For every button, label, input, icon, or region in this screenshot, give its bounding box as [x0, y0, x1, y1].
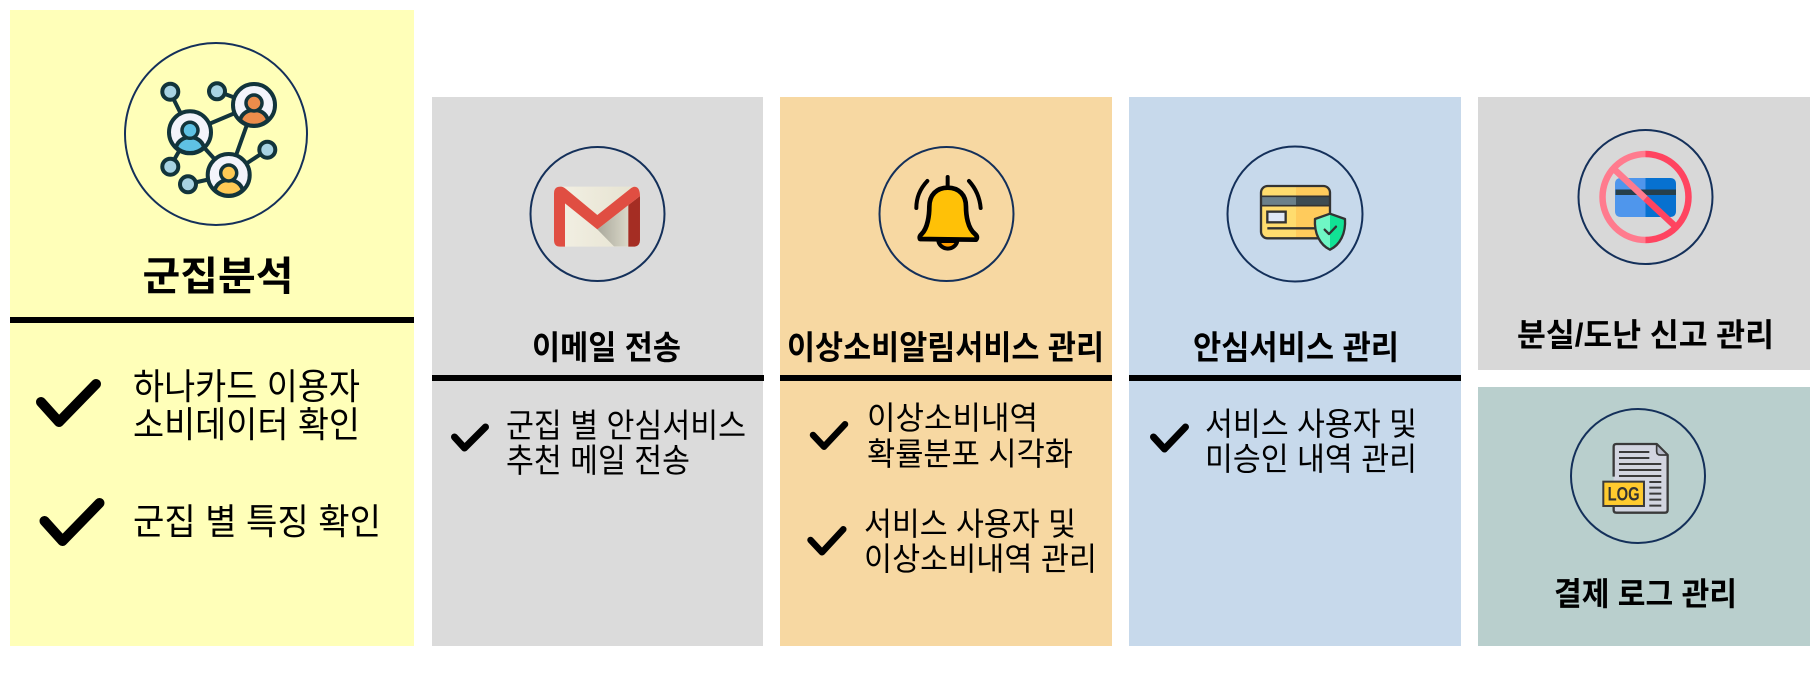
text: 안심서비스 추천 메일 전송: [506, 407, 746, 479]
panel: 안심서비스 관리: [1129, 97, 1461, 646]
icon: mail: [530, 147, 664, 281]
icon: secure card: [1228, 146, 1362, 282]
heading: 이상소비알림서비스 관리: [787, 329, 1104, 366]
icon: bell: [880, 147, 1014, 281]
text: 이용자 소비데이터 확인: 소비데이터 확인: [133, 404, 360, 445]
check mark: [810, 529, 843, 552]
text: 서비스 사용자 및 미승인 내역 관리: 미승인 내역 관리: [1205, 441, 1417, 477]
check mark: [454, 427, 486, 448]
text: 군집 별 특징 확인: 군집 별 특징 확인: [133, 501, 381, 542]
panel: 결제 로그 관리: [1478, 387, 1810, 646]
check mark: [813, 424, 845, 447]
text: 이용자 소비데이터 확인: [133, 366, 360, 445]
icon: log file: [1571, 409, 1705, 543]
text: 서비스 사용자 및 이상소비내역 관리: 서비스 사용자 및: [864, 506, 1076, 542]
icon: log file: LOG: [1608, 485, 1640, 506]
panel: 이메일 전송: [432, 97, 764, 646]
text: 서비스 사용자 및 미승인 내역 관리: [1205, 406, 1417, 477]
heading: 분실/도난 신고 관리: [1517, 317, 1774, 353]
text: 서비스 사용자 및 이상소비내역 관리: 이상소비내역 관리: [864, 541, 1097, 577]
check mark: [44, 503, 100, 541]
text: 서비스 사용자 및 미승인 내역 관리: 서비스 사용자 및: [1205, 406, 1417, 442]
text: 이상소비내역 확률분포 시각화: 확률분포 시각화: [867, 436, 1073, 472]
text: 이상소비내역 확률분포 시각화: 이상소비내역: [867, 400, 1038, 436]
heading: 안심서비스 관리: [1193, 329, 1399, 366]
panel: 분실/도난 신고 관리: [1478, 97, 1810, 370]
heading: 군집분석: [142, 255, 294, 299]
text: 안심서비스 추천 메일 전송: 군집 별 안심서비스: [506, 407, 746, 444]
text: 서비스 사용자 및 이상소비내역 관리: [864, 506, 1097, 577]
panel: 군집분석: [10, 10, 414, 646]
check mark: [1154, 427, 1186, 449]
text: 안심서비스 추천 메일 전송: 추천 메일 전송: [506, 442, 690, 479]
icon: network of people: [125, 43, 307, 225]
check mark: [41, 384, 96, 422]
panel: 이상소비알림서비스 관리: [780, 97, 1112, 646]
heading: 결제 로그 관리: [1554, 576, 1737, 612]
text: 이용자 소비데이터 확인: 하나카드 이용자: [133, 366, 360, 407]
text: 이상소비내역 확률분포 시각화: [867, 400, 1073, 472]
icon: blocked card: [1578, 130, 1712, 264]
heading: 이메일 전송: [532, 329, 681, 366]
